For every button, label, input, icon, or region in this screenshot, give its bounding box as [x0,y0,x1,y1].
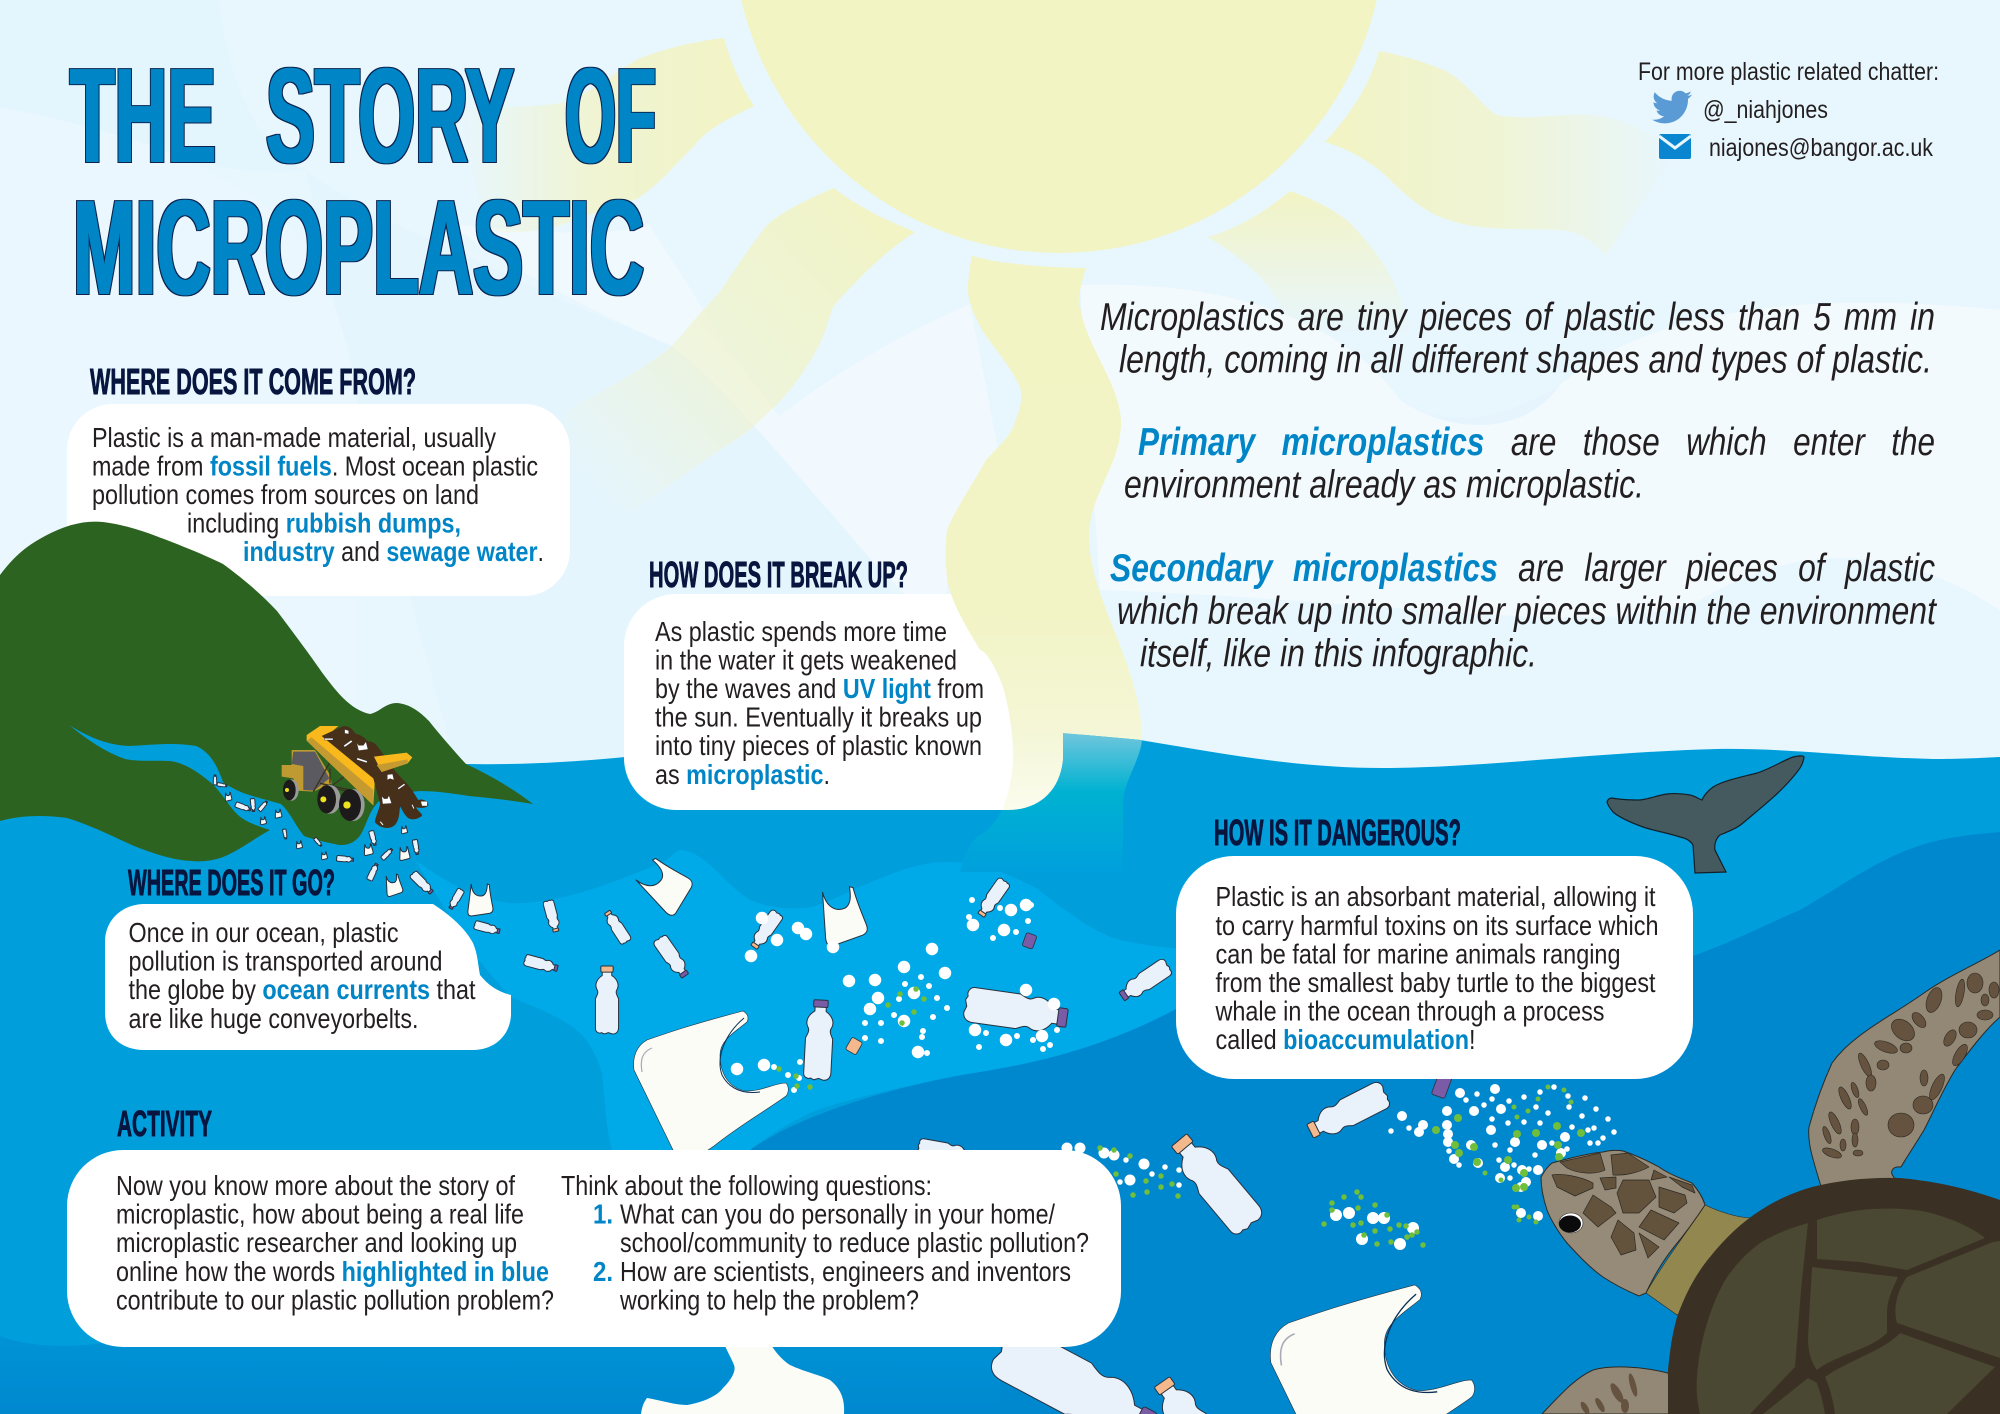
rubbish pieces [324,729,427,826]
yellow tailgate [374,753,412,772]
particles near bottle beside the activity card [1067,1148,1179,1196]
panel: how does it break up [624,554,1062,810]
rear flipper scutes [1579,1373,1639,1414]
eye [1559,1213,1583,1233]
litter flowing from river into the ocean [213,775,692,1034]
microplastic particles: mid ocean [737,900,1057,1090]
intro text [1100,296,1938,676]
icon: twitter bird [1652,91,1692,123]
body text: Once in our ocean, plastic [128,917,399,948]
body text: can be fatal for marine animals ranging [1216,938,1620,970]
head scutes [1552,1153,1695,1258]
rear flipper [1542,1367,1680,1414]
title: MICROPLASTIC [73,172,644,323]
intro text: itself, like in this infographic. [1140,632,1537,676]
activity text, questions: 2. [593,1256,613,1287]
head [1541,1150,1705,1296]
bottles behind the activity card [916,1071,1453,1414]
body text: Plastic is an absorbant material, allowing it [1216,881,1656,912]
contact heading: For more plastic related chatter: [1638,58,1939,86]
intro text: environment already as microplastic. [1124,464,1644,506]
contact details [1638,58,1939,162]
front flipper scutes [1821,973,1999,1160]
dump bed [307,726,375,805]
shell plates [1697,1209,2000,1414]
body text: the sun. Eventually it breaks up [655,702,982,732]
deep water [600,832,2000,1414]
activity text, left column: Now you know more about the story of [116,1170,515,1201]
sun ray: vertical, over the sky and card [946,256,1142,810]
cab window [292,752,329,791]
body text: pollution comes from sources on land [92,479,479,510]
heading: WHERE DOES IT GO? [128,862,335,903]
title: THE [70,40,216,191]
body text: as microplastic. [655,759,830,790]
activity text, questions: How are scientists, engineers and inventors [620,1256,1071,1287]
whale tail [1607,756,1804,873]
title [70,40,656,323]
deep water below the activity card [0,1300,1000,1414]
sun ray: upper left [459,38,754,232]
body text [655,616,984,790]
card [1176,856,1693,1079]
heading: WHERE DOES IT COME FROM? [90,361,416,402]
loose bottle caps [845,1037,863,1055]
body text: in the water it gets weakened [655,644,957,676]
body text: to carry harmful toxins on its surface which [1216,910,1658,941]
activity text, questions [561,1170,1089,1316]
twitter handle: @_niahjones [1703,96,1828,124]
email address: niajones@bangor.ac.uk [1709,134,1933,162]
text: OF [565,40,656,191]
activity text, left column: online how the words highlighted in blue [116,1256,549,1287]
heading: HOW IS IT DANGEROUS? [1214,812,1461,853]
body text: including rubbish dumps, [187,508,461,538]
turtle [1541,950,2000,1414]
river [69,725,304,850]
neck [1646,1205,1750,1315]
carrier bag at bottom right [1270,1285,1475,1414]
activity text, questions: Think about the following questions: [561,1170,932,1201]
panel: how is it dangerous [1176,812,1693,1079]
panel: where does it come from [67,361,570,596]
card [105,904,511,1050]
body text: by the waves and UV light from [655,673,984,704]
body text: Plastic is a man-made material, usually [92,422,496,453]
body text [128,917,476,1034]
body text: the globe by ocean currents that [128,974,476,1005]
icon: email envelope [1659,134,1691,159]
body text: from the smallest baby turtle to the biggest [1216,967,1656,998]
truck cab [282,750,332,792]
microplastic cloud: small lower group [1324,1192,1423,1245]
panel: where does it go [105,862,511,1050]
activity text, left column: microplastic researcher and looking up [116,1227,517,1258]
activity text, questions: What can you do personally in your home/ [620,1199,1055,1230]
body text: As plastic spends more time [655,616,947,647]
card [67,1150,1121,1347]
body text: are like huge conveyorbelts. [128,1003,418,1034]
microplastic cloud in front of the turtle [1391,1087,1614,1222]
sun rays behind the sun [459,38,1676,540]
sun [733,0,1385,253]
heading: ACTIVITY [117,1103,212,1144]
wheels [283,779,365,821]
body text: pollution is transported around [128,946,442,976]
panel: activity [67,1103,1121,1347]
activity text, questions: school/community to reduce plastic pollution? [620,1227,1089,1258]
body text: whale in the ocean through a process [1215,996,1604,1026]
heading: HOW DOES IT BREAK UP? [649,554,908,595]
medium bags and bottles in mid ocean [633,851,1174,1081]
activity text, questions: working to help the problem? [619,1284,919,1316]
hill [0,522,533,861]
body text: industry and sewage water. [243,536,544,567]
sunlight glow in the water [960,733,1142,872]
body text: made from fossil fuels. Most ocean plastic [92,450,538,482]
sun ray: lower right [1207,191,1410,335]
sun ray: upper right [1325,51,1676,255]
carrier bag at bottom centre [641,1340,844,1414]
body text: called bioaccumulation! [1216,1024,1476,1055]
icon: dump truck tipping rubbish [282,726,428,828]
sun ray: lower left [560,188,915,540]
activity text, left column [116,1170,554,1316]
ocean [0,733,2000,1414]
front flipper [1809,950,2000,1190]
body text [1215,881,1658,1055]
activity text, left column: microplastic, how about being a real life [116,1199,524,1230]
large carrier bag in mid ocean [634,1011,788,1162]
title: STORY [266,40,514,191]
light current band [415,850,1200,1150]
chassis [313,763,365,794]
rubbish pile [322,726,428,828]
shell [1668,1178,2000,1414]
body text: into tiny pieces of plastic known [655,730,982,761]
activity text, left column: contribute to our plastic pollution problem? [116,1284,554,1316]
activity text, questions: 1. [593,1199,613,1230]
card [624,594,1062,810]
card [67,404,570,596]
body text [92,422,544,567]
